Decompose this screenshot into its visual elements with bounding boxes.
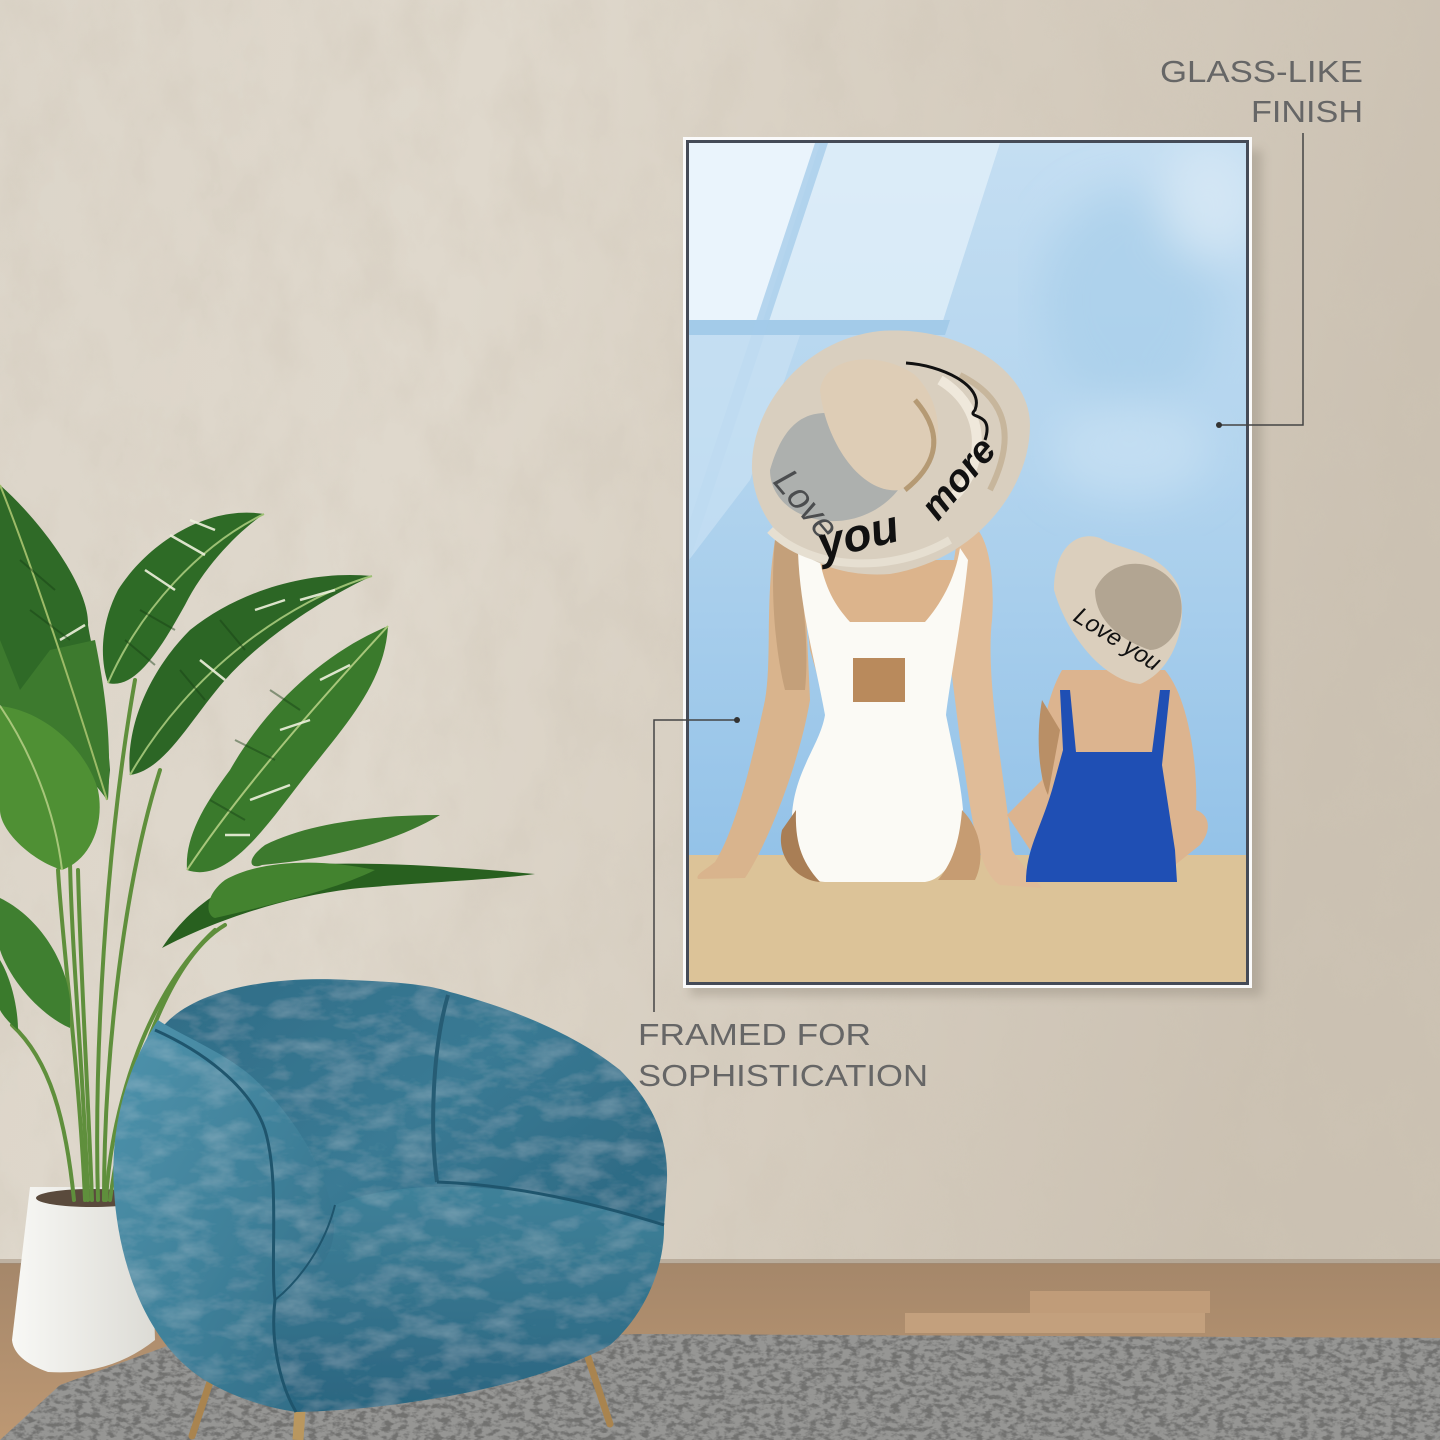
mother hat: more — [913, 430, 1005, 528]
child hat — [1054, 536, 1182, 684]
child: Love you — [1069, 602, 1166, 677]
leaf: low right tips — [251, 815, 440, 866]
armchair — [113, 979, 667, 1440]
hat lettering: Love — [766, 461, 847, 547]
wooden floor — [0, 1259, 1440, 1440]
mother hair — [773, 540, 806, 690]
mother right arm — [952, 532, 1016, 855]
mother — [698, 532, 1016, 882]
callout: glass-like finish: FINISH — [1251, 94, 1363, 129]
callout: glass-like finish — [1160, 54, 1363, 428]
callout: framed for sophistication: FRAMED FOR — [638, 1017, 871, 1052]
mother hat — [752, 330, 1030, 574]
callout: glass-like finish: GLASS-LIKE — [1160, 54, 1363, 89]
child — [1007, 536, 1208, 882]
mother back — [808, 560, 958, 674]
chair left arm — [113, 1020, 334, 1412]
callout: framed for sophistication — [638, 717, 928, 1093]
leaf: left large light — [0, 706, 100, 870]
leaf: far left top — [0, 485, 110, 800]
chair seat — [274, 1187, 664, 1412]
plant stems — [12, 680, 225, 1200]
child body — [1007, 670, 1208, 865]
mother left arm — [697, 540, 810, 879]
plant — [0, 485, 535, 1200]
mother hat: you — [810, 499, 904, 570]
chair back — [160, 979, 667, 1240]
leaf: long middle — [129, 575, 372, 775]
mother swimsuit — [792, 548, 968, 882]
chair seams — [155, 995, 664, 1412]
chair legs — [192, 1348, 610, 1440]
painting sand — [689, 855, 1246, 982]
wall art frame — [683, 137, 1262, 996]
painting sky — [689, 143, 1246, 863]
leaf: big right — [187, 626, 388, 872]
callout: framed for sophistication: SOPHISTICATION — [638, 1058, 928, 1093]
plant pot — [12, 1187, 155, 1372]
leaf: left low — [0, 898, 70, 1028]
leaf: top centre — [103, 513, 264, 684]
rug — [0, 1334, 1440, 1440]
painting — [689, 140, 1260, 982]
leaf ribs — [60, 520, 350, 835]
